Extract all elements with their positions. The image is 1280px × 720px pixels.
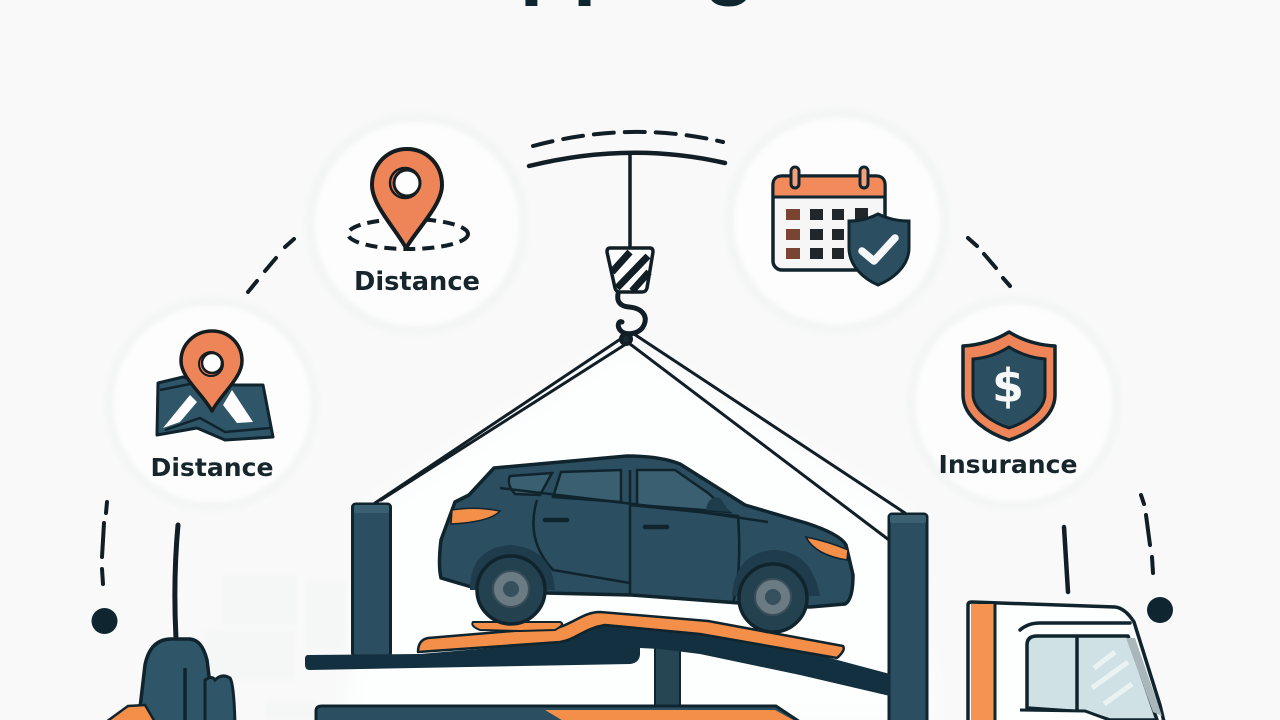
panel: insurance — [911, 300, 1117, 506]
connector: dashed left lower — [102, 502, 107, 584]
device slot — [183, 668, 187, 720]
cab shell — [968, 602, 1165, 720]
truck cab — [968, 602, 1165, 720]
car — [440, 456, 853, 632]
car headlights — [451, 508, 848, 560]
connector: dashed left upper — [248, 239, 294, 292]
dollar sign: $ — [992, 359, 1024, 413]
circle badge — [729, 113, 945, 329]
marker dot left — [92, 608, 118, 634]
window pillar — [1075, 636, 1079, 711]
car windows — [509, 470, 729, 512]
lift: centre post — [655, 645, 680, 710]
left device — [106, 525, 235, 720]
icon: dashed radius ellipse — [348, 219, 468, 249]
circle badge — [109, 301, 315, 507]
circle badge — [310, 117, 524, 331]
label: insurance: Insurance — [938, 450, 1078, 479]
grey a-pillar — [1126, 638, 1162, 716]
orange corner — [106, 705, 155, 720]
crane: beam arc — [529, 153, 725, 166]
rear wheel — [470, 545, 555, 624]
device side — [205, 676, 235, 720]
marker dot right — [1147, 597, 1173, 623]
lift: right pillar — [889, 514, 927, 720]
lift: upper deck — [305, 620, 890, 696]
label: distance: Distance — [354, 267, 480, 297]
car door lines — [500, 470, 768, 603]
cab windows — [1027, 636, 1157, 720]
icon: shield with check — [849, 214, 909, 285]
orange stripe — [971, 604, 994, 720]
icon: location pin — [181, 331, 242, 411]
visor — [1020, 623, 1130, 630]
crane: hook block — [607, 248, 653, 292]
panel: distance pin with radius — [310, 117, 524, 331]
panel: schedule — [729, 113, 945, 329]
icon: folded map — [157, 377, 273, 440]
lifting ropes — [375, 334, 905, 540]
crane: cable — [628, 153, 632, 248]
antenna — [175, 525, 178, 638]
connector: dashed right lower — [1141, 495, 1153, 573]
lift: left pillar — [352, 504, 390, 656]
door top — [1020, 710, 1115, 720]
icon: location pin — [372, 149, 442, 248]
truck: lower deck — [316, 706, 800, 720]
car body — [440, 456, 853, 607]
car mirror — [706, 498, 730, 512]
lift: wheel chocks — [472, 622, 562, 631]
device body — [138, 639, 215, 720]
solid line right — [1064, 527, 1068, 592]
crane: hook — [618, 294, 645, 334]
lift: orange ramp — [418, 612, 844, 658]
icon: calendar — [773, 167, 885, 270]
panel: distance map — [109, 301, 315, 507]
front wheel — [732, 550, 820, 632]
icon: shield with dollar — [963, 332, 1055, 440]
window glare — [1092, 652, 1132, 704]
circle badge — [911, 300, 1117, 506]
crane: dashed arc — [533, 132, 723, 146]
label: distance: Distance — [150, 453, 274, 482]
connector: dashed right upper — [968, 238, 1010, 286]
